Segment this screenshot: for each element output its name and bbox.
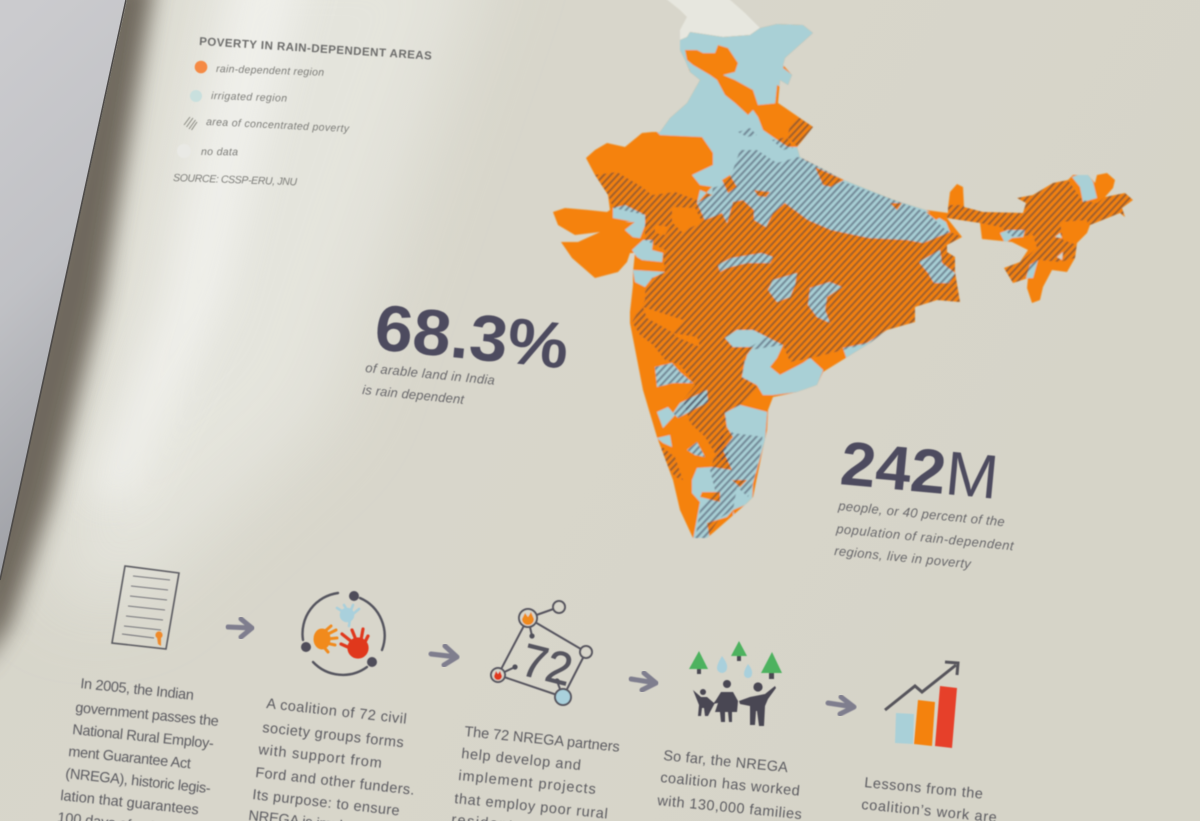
icon: 72 partners network: 72 bbox=[517, 633, 578, 696]
step text: lessons bbox=[861, 775, 998, 821]
caption: people in poverty bbox=[834, 498, 1016, 572]
rain-dependent pockets on irrigated land bbox=[685, 45, 946, 540]
arrow 4 bbox=[828, 697, 854, 714]
stat: 68.3%: 68.3% bbox=[372, 290, 572, 383]
no data region bbox=[665, 0, 760, 50]
stat: 242M: 242M bbox=[838, 429, 1001, 513]
step text: NREGA passes bbox=[57, 676, 219, 821]
legend heading: POVERTY IN RAIN-DEPENDENT AREAS bbox=[199, 36, 432, 63]
arrow 1 bbox=[228, 619, 252, 637]
left facing page bbox=[0, 0, 126, 580]
legend: no data bbox=[177, 144, 238, 158]
step text: partners help: implement projects bbox=[458, 768, 597, 798]
step text: partners help: The 72 NREGA partners bbox=[464, 724, 620, 756]
legend: area of concentrated poverty: area of concentrated poverty bbox=[206, 116, 350, 135]
icon: family with trees and water bbox=[689, 641, 782, 726]
red hand bbox=[341, 629, 368, 657]
step text: coalition forms: society groups forms bbox=[262, 720, 404, 751]
step text: NREGA passes: government passes the bbox=[75, 700, 219, 730]
step text: families reached bbox=[656, 748, 802, 821]
page lighting glare bbox=[0, 0, 500, 670]
unhatched orange blobs bbox=[643, 207, 1088, 347]
step text: lessons: Lessons from the bbox=[864, 775, 984, 803]
step text: NREGA passes: National Rural Employ- bbox=[72, 722, 215, 752]
caption: people in poverty: people, or 40 percent of the bbox=[837, 498, 1005, 529]
holes bbox=[1055, 233, 1062, 238]
icon: 72 partners network bbox=[491, 601, 592, 705]
step text: families reached: coalition has worked bbox=[660, 770, 801, 800]
caption: arable land: is rain dependent bbox=[362, 382, 466, 407]
irrigated regions bbox=[613, 20, 1097, 540]
silhouette: rain-dependent orange bbox=[552, 24, 1134, 539]
arrow 2 bbox=[431, 646, 457, 665]
legend: rain-dependent region: rain-dependent region bbox=[216, 63, 324, 79]
step text: coalition forms: with support from bbox=[257, 742, 383, 772]
legend bbox=[173, 36, 432, 188]
unhatched irrigated overlay bbox=[625, 180, 823, 437]
map of India bbox=[540, 0, 1150, 560]
step text: coalition forms bbox=[248, 696, 415, 821]
trees bbox=[689, 641, 782, 673]
step text: partners help: help develop and bbox=[461, 746, 582, 774]
caption: people in poverty: population of rain-dependent bbox=[835, 521, 1016, 553]
legend: irrigated region: irrigated region bbox=[211, 90, 287, 105]
icon: rising bar chart bbox=[885, 662, 958, 748]
icon: legal document bbox=[112, 566, 179, 649]
step text: partners help bbox=[451, 724, 620, 821]
step text: coalition forms: Ford and other funders. bbox=[255, 765, 415, 799]
step text: NREGA passes: (NREGA), historic legis- bbox=[65, 766, 212, 797]
step text: NREGA passes: In 2005, the Indian bbox=[80, 676, 195, 704]
source: SOURCE: CSSP-ERU, JNU bbox=[173, 172, 298, 188]
icon: coalition of hands bbox=[301, 591, 385, 675]
arrow 3 bbox=[631, 673, 656, 690]
caption: people in poverty: regions, live in poverty bbox=[834, 543, 973, 572]
step text: coalition forms: A coalition of 72 civil bbox=[266, 696, 407, 728]
legend: no data: no data bbox=[201, 146, 238, 158]
concentrated poverty hatching bbox=[595, 117, 1135, 540]
step text: coalition forms: Its purpose: to ensure bbox=[252, 787, 400, 819]
caption: arable land: of arable land in India bbox=[365, 360, 496, 388]
caption: arable land bbox=[362, 360, 496, 407]
step text: families reached: So far, the NREGA bbox=[663, 748, 789, 776]
blue hand bbox=[337, 605, 359, 626]
step text: NREGA passes: lation that guarantees bbox=[60, 788, 199, 819]
orange hand bbox=[315, 626, 337, 652]
water drops bbox=[717, 656, 752, 678]
step text: NREGA passes: ment Guarantee Act bbox=[68, 744, 192, 772]
stat: 242M bbox=[834, 429, 1016, 572]
family figures bbox=[693, 680, 776, 726]
